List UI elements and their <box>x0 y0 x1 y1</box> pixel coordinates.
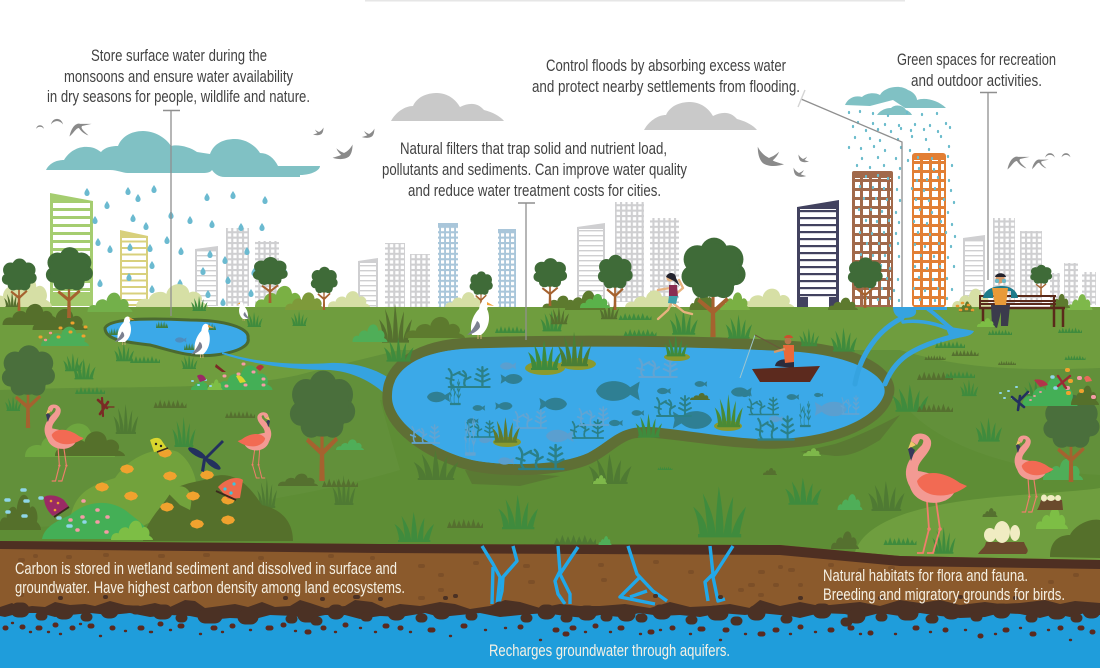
fish: faint <box>479 362 847 465</box>
small pond <box>105 319 248 356</box>
text: natural filters <box>382 139 687 200</box>
rain drops: left <box>84 185 288 326</box>
flood towers: brown and orange <box>852 153 946 308</box>
text: store surface water: monsoons and ensure water availability <box>64 67 293 86</box>
rain: fine drops over towers <box>849 111 955 301</box>
shadow patches near pond edges <box>465 415 900 486</box>
pole: natural filters <box>518 203 535 340</box>
pond: main <box>388 341 889 470</box>
text: groundwater recharge: Recharges groundwater through aquifers. <box>489 641 730 660</box>
text: store surface water: Store surface water during the <box>91 46 267 65</box>
dragonfly: small blue <box>1012 392 1028 410</box>
rock layer <box>0 596 1100 640</box>
birds: flood flock <box>758 147 809 177</box>
man with binoculars on bench <box>983 273 1018 328</box>
trees: lower field <box>2 345 1100 482</box>
fish: dark <box>427 374 823 429</box>
flamingo: small right <box>1015 436 1054 512</box>
city skyline: far right <box>963 218 1096 307</box>
roots: water seeping to aquifer <box>482 546 733 607</box>
city skyline: left <box>50 193 279 306</box>
city skyline: centre <box>358 202 679 308</box>
leader: control floods <box>798 90 902 307</box>
insect: purple butterfly <box>44 495 69 517</box>
seaweed: dark <box>446 367 810 469</box>
mound cluster with flowers and insects <box>0 424 293 541</box>
flowers beside bench <box>957 301 995 327</box>
trees <box>2 238 1052 337</box>
text: control floods <box>532 56 800 96</box>
boat and fisherman <box>740 335 820 382</box>
text: carbon storage: groundwater. Have highest carbon density among land ecosystems. <box>15 578 405 597</box>
city skyline: right, navy building <box>797 200 839 308</box>
flamingo: left <box>45 405 84 481</box>
dragonfly: dark blue <box>187 440 224 472</box>
birds: centre flock <box>313 128 374 159</box>
pole: store surface water <box>163 110 180 316</box>
birds: right flock <box>1008 153 1070 169</box>
dragonfly: small red <box>1058 376 1070 388</box>
birds: left flock <box>36 119 92 136</box>
text: green spaces: and outdoor activities. <box>911 71 1042 90</box>
text: habitats <box>823 566 1065 604</box>
bank reeds and grass tufts <box>4 292 1086 554</box>
seaweed: faint <box>411 357 859 454</box>
insect: yellow butterfly <box>150 438 168 452</box>
soil layer <box>0 541 1100 625</box>
text: carbon storage: Carbon is stored in wetland sediment and dissolved in surface and <box>15 559 397 578</box>
clipped header remnant at top edge <box>365 0 905 2</box>
text: carbon storage <box>15 559 405 597</box>
flamingo: middle, mirrored <box>238 412 271 478</box>
text: control floods: and protect nearby settlements from flooding. <box>532 77 800 96</box>
flamingo: large right <box>906 434 967 553</box>
text: store surface water: in dry seasons for people, wildlife and nature. <box>47 87 310 106</box>
clouds: small teal above towers <box>845 87 946 115</box>
stream: small pond to large pond <box>222 352 402 402</box>
text: natural filters: Natural filters that trap solid and nutrient load, <box>400 139 667 158</box>
text: natural filters: pollutants and sediments. Can improve water quality <box>382 160 687 179</box>
flower bush: upper middle field <box>191 364 272 390</box>
bottom-right dark bush <box>1036 508 1100 558</box>
text: control floods: Control floods by absorbing excess water <box>546 56 786 75</box>
text: store surface water <box>47 46 310 106</box>
dragonfly: red <box>98 398 114 416</box>
nest: small eggs <box>1037 494 1063 510</box>
mounds: upper field <box>2 286 1092 549</box>
nest: large eggs <box>978 521 1028 554</box>
white birds <box>114 301 494 358</box>
ground: grass <box>0 307 1100 570</box>
text: natural filters: and reduce water treatment costs for cities. <box>408 181 661 200</box>
streams: from flooded city into pond <box>855 307 974 384</box>
cloud: large rain cloud <box>46 131 320 177</box>
text: green spaces <box>897 50 1056 90</box>
clouds: grey <box>391 93 757 130</box>
flower bush: top left <box>40 323 89 346</box>
groundwater <box>0 613 1100 668</box>
runner <box>658 273 692 319</box>
insect: coral butterfly <box>216 478 243 500</box>
text: habitats: Natural habitats for flora and fauna. <box>823 566 1028 585</box>
horizon shrubs <box>0 275 992 308</box>
flower bush: right <box>1000 370 1099 406</box>
bench <box>979 295 1065 327</box>
reed islands in pond <box>492 332 743 447</box>
pole: green spaces <box>980 92 997 280</box>
